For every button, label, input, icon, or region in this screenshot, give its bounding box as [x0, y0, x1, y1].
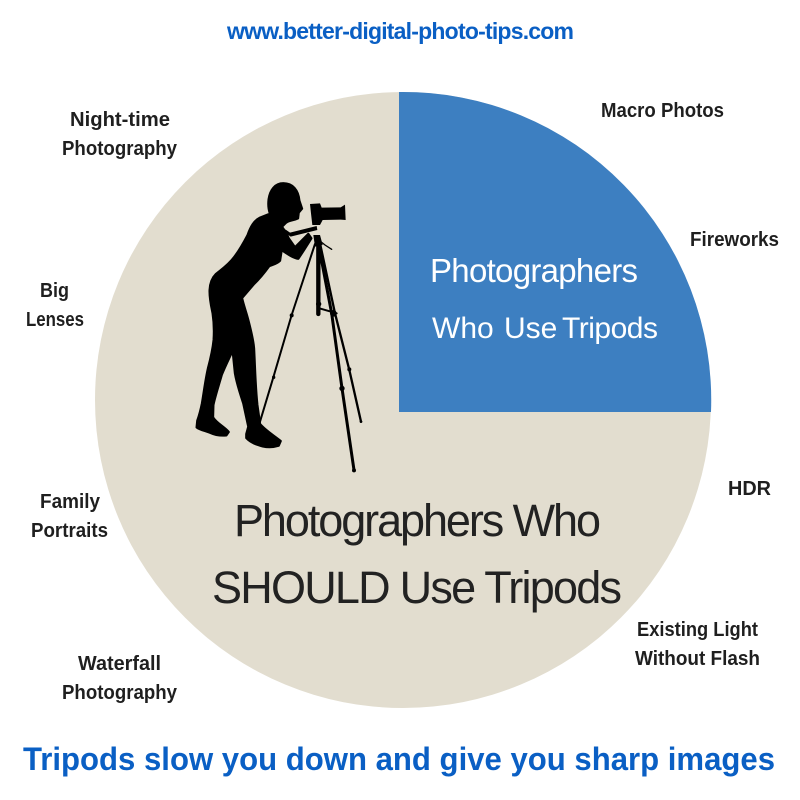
label: waterfall photography: Photography: [62, 682, 178, 704]
blue slice label: Photographers: [430, 252, 638, 289]
label: big lenses: Big: [40, 280, 69, 302]
label: night-time photography: [62, 109, 178, 160]
beige slice label: [212, 495, 622, 613]
pie slice: photographers who use tripods: [399, 92, 711, 412]
bottom tagline: Tripods slow you down and give you sharp images: [23, 741, 775, 777]
label: macro photos: Macro Photos: [601, 100, 724, 122]
website url heading: www.better-digital-photo-tips.com: [226, 18, 574, 44]
blue slice label: Who: [432, 312, 494, 345]
label: hdr: HDR: [728, 478, 772, 500]
label: big lenses: Lenses: [26, 309, 84, 331]
blue slice label: Tripods: [562, 312, 658, 345]
pie chart: [95, 92, 711, 708]
label: fireworks: Fireworks: [690, 229, 779, 251]
label: family portraits: Family: [40, 491, 101, 513]
label: big lenses: [26, 280, 84, 331]
icon: photographer with tripod silhouette: [197, 183, 362, 472]
person: [197, 183, 311, 447]
pie slice: photographers who should use tripods: [95, 92, 711, 708]
blue slice label: [430, 252, 658, 345]
label: family portraits: Portraits: [31, 520, 108, 542]
camera: [310, 203, 346, 225]
blue slice label: Use: [504, 312, 557, 345]
label: waterfall photography: Waterfall: [78, 653, 161, 675]
label: existing light without flash: [635, 619, 760, 670]
beige slice label: SHOULD Use Tripods: [212, 562, 622, 613]
label: existing light without flash: Existing Light: [637, 619, 758, 641]
label: waterfall photography: [62, 653, 178, 704]
label: existing light without flash: Without Flash: [635, 648, 760, 670]
tripod: [260, 240, 361, 470]
label: family portraits: [31, 491, 108, 542]
beige slice label: Photographers Who: [234, 495, 601, 546]
label: night-time photography: Night-time: [70, 109, 170, 131]
label: night-time photography: Photography: [62, 138, 178, 160]
